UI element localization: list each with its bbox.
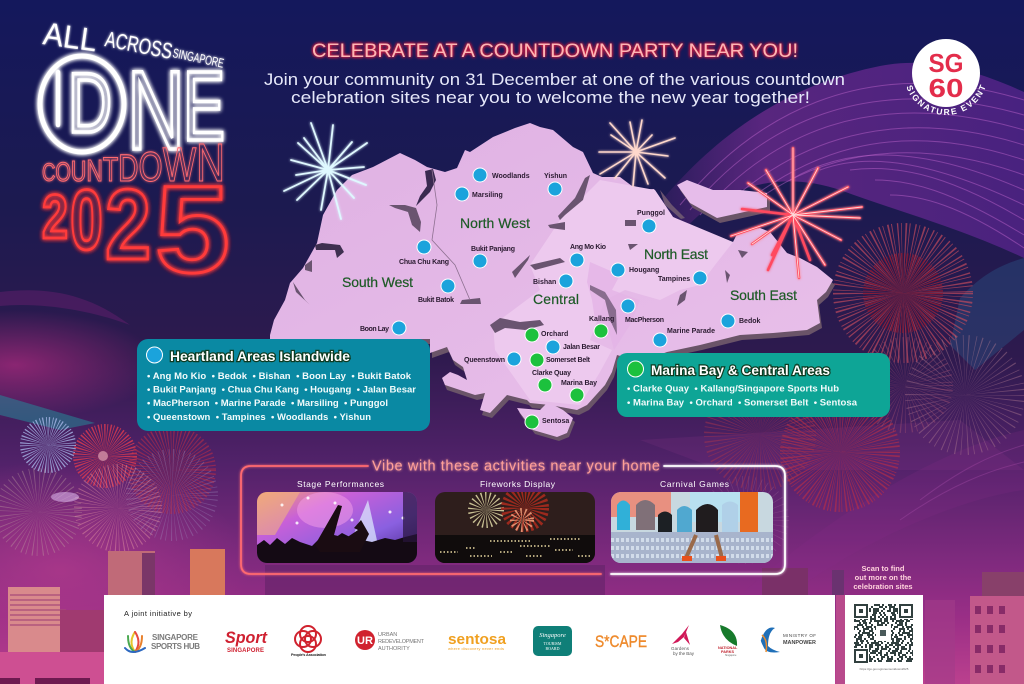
logo tagline: All Across Singapore: SINGAPORE (171, 45, 226, 71)
neon frame (241, 466, 785, 574)
list of central areas: • Clarke Quay • Kallang/Singapore Sports Hub (627, 384, 839, 394)
logo: National Parks: PARKS (721, 650, 734, 654)
headline: CELEBRATE AT A COUNTDOWN PARTY NEAR YOU! (312, 40, 798, 62)
logo: Gardens by the Bay: Gardens (671, 646, 690, 651)
location: Punggol: Punggol (637, 210, 665, 217)
Pulau Ubin island (680, 185, 770, 223)
panel heading: Marina Bay & Central Areas (651, 363, 830, 378)
location: Clarke Quay (532, 370, 571, 392)
logo: People's Association (291, 626, 327, 657)
logo: One Countdown 2025 (40, 15, 230, 299)
panel: Heartland areas (137, 339, 430, 431)
logo: Sentosa: where discovery never ends (448, 646, 504, 651)
logo: Ministry of Manpower: MANPOWER (783, 640, 817, 646)
QR url: https://go.gov.sg/onecountdown2025 (860, 667, 909, 671)
Pulau Ubin island top (677, 180, 767, 218)
logo tagline: All Across Singapore: ACROSS (103, 26, 175, 64)
logo: National Parks: NATIONAL (718, 646, 738, 650)
location: Hougang (611, 263, 659, 277)
teal light beam (0, 395, 95, 430)
location: Ang Mo Kio (570, 244, 606, 267)
intro text (264, 70, 845, 107)
logo: Singapore Tourism Board: Singapore (539, 632, 566, 639)
location: Tampines: Tampines (658, 276, 690, 283)
panel: Marina Bay and Central areas (617, 353, 890, 417)
logo word: COUNTDOWN: COUNTDOWN (42, 133, 225, 193)
city buildings (0, 549, 1024, 684)
central and north east lighter regions (493, 180, 733, 405)
panel heading: Heartland Areas Islandwide (170, 349, 351, 364)
logo: Urban Redevelopment Authority (355, 630, 425, 652)
initiative label: A joint initiative by (124, 609, 192, 618)
list of heartland areas: • Bukit Panjang • Chua Chu Kang • Hougang • Jalan Besar (147, 384, 416, 396)
logo: Scape: S*CAPE (595, 632, 647, 651)
activities heading: Vibe with these activities near your home (372, 458, 660, 474)
logo word: ONE: E (183, 51, 225, 161)
central inner region (587, 262, 640, 350)
location: Bishan: Bishan (533, 279, 556, 286)
partner logo band (104, 595, 835, 684)
logo tagline: All Across Singapore: ALL (41, 15, 100, 58)
location: Marina Bay: Marina Bay (561, 380, 597, 387)
label: Stage Performances: Stage Performances (297, 479, 384, 489)
logo number: 2025: 0 (70, 173, 103, 268)
map of Singapore (270, 123, 835, 441)
location: Marsiling (455, 187, 503, 201)
logo: Urban Redevelopment Authority: URBAN (378, 632, 397, 638)
panel: activities (241, 458, 785, 574)
list of heartland areas: • Ang Mo Kio • Bedok • Bishan • Boon Lay • Bukit Batok (147, 371, 412, 382)
photo: fireworks display (435, 492, 595, 563)
SG60 badge: SG (928, 48, 964, 78)
scan caption: Scan to find (862, 564, 905, 573)
location: Orchard (525, 328, 568, 342)
logo: National Parks: Singapore (725, 654, 737, 657)
logo number: 2025: 2 (42, 183, 68, 252)
SG60 badge (906, 39, 986, 115)
Sentosa island top (517, 402, 573, 437)
SG60 badge: SIGNATURE EVENT (906, 84, 986, 115)
location: Boon Lay (360, 321, 406, 335)
firework: pink burst (599, 120, 675, 186)
location: Jalan Besar: Jalan Besar (563, 344, 600, 351)
logo number: 2025: 2 (105, 169, 151, 281)
QR code card (845, 595, 923, 684)
region name: North West: North West (460, 215, 530, 231)
photo: carnival games (611, 492, 773, 563)
logo: Ministry of Manpower: MINISTRY OF (783, 633, 816, 638)
logo: Gardens by the Bay (671, 625, 695, 656)
logo: Urban Redevelopment Authority: AUTHORITY (378, 646, 410, 652)
location: Marine Parade (653, 328, 715, 347)
firework: cyan burst (284, 123, 367, 219)
logo: Ministry of Manpower (761, 628, 817, 652)
location: Yishun (544, 173, 567, 196)
logo number: 2025: 5 (155, 161, 230, 299)
Sentosa island (519, 406, 575, 441)
blue light streak (950, 258, 1024, 370)
logo: Sentosa: sentosa (448, 631, 507, 648)
location: Chua Chu Kang (399, 240, 449, 266)
SG60 badge: 60 (928, 73, 964, 103)
logo word: ONE: N (127, 48, 185, 173)
location: Bishan (533, 274, 573, 288)
logo: National Parks (718, 625, 738, 657)
background fireworks left (16, 431, 195, 534)
logo: Urban Redevelopment Authority: UR (357, 635, 373, 647)
location: Orchard: Orchard (541, 331, 568, 338)
location: Chua Chu Kang: Chua Chu Kang (399, 259, 449, 266)
location: Bukit Batok: Bukit Batok (418, 297, 454, 304)
location: MacPherson (621, 299, 664, 324)
logo: Singapore Sports Hub (125, 632, 200, 652)
location: Woodlands (473, 168, 530, 182)
QR pattern (854, 605, 913, 661)
logo: Singapore Sports Hub: SINGAPORE (152, 633, 199, 642)
location: Kallang: Kallang (589, 316, 614, 323)
label: Fireworks Display: Fireworks Display (480, 479, 556, 489)
scan caption (853, 564, 913, 591)
location: Boon Lay: Boon Lay (360, 326, 389, 333)
legend dot blue (146, 347, 162, 363)
logo word: ONE: D (68, 56, 112, 150)
label: Carnival Games: Carnival Games (660, 479, 729, 489)
reservoirs and dark channels (293, 169, 748, 335)
map extrusion shadow (272, 128, 835, 418)
photo: stage performance (257, 492, 417, 563)
location: Bukit Panjang: Bukit Panjang (471, 246, 515, 253)
location: Sentosa (525, 415, 569, 429)
region name: Central: Central (533, 291, 579, 307)
scan caption: out more on the (855, 573, 911, 582)
logo: Sport Singapore: Sport (225, 628, 268, 647)
logo: Singapore Tourism Board: BOARD (545, 646, 560, 651)
location: Punggol (637, 210, 665, 233)
background fireworks right (723, 258, 995, 542)
location: MacPherson: MacPherson (625, 317, 664, 324)
location: Queenstown (464, 352, 521, 366)
location: Somerset Belt: Somerset Belt (546, 357, 591, 364)
list of central areas: • Marina Bay • Orchard • Somerset Belt • Sentosa (627, 398, 858, 408)
region name: South East: South East (730, 287, 797, 303)
logo tagline: All Across Singapore (41, 15, 226, 71)
location: Clarke Quay: Clarke Quay (532, 370, 571, 377)
firework: red burst (731, 148, 862, 278)
location: Hougang: Hougang (629, 267, 659, 274)
legend dot green (628, 361, 644, 377)
QR finder squares (853, 603, 914, 664)
scan caption: celebration sites (853, 582, 913, 591)
location: Kallang (589, 316, 614, 338)
location: Yishun: Yishun (544, 173, 567, 180)
logo: Urban Redevelopment Authority: REDEVELOPMENT (378, 639, 425, 645)
logo: Singapore Tourism Board (533, 626, 572, 656)
location: Marina Bay (561, 380, 597, 402)
list of heartland areas: • Queenstown • Tampines • Woodlands • Yishun (147, 412, 371, 423)
location: Sentosa: Sentosa (542, 418, 569, 425)
logo: Singapore Sports Hub: SPORTS HUB (151, 642, 200, 651)
location: Marsiling: Marsiling (472, 192, 503, 199)
logo word: ONE (40, 48, 225, 173)
list of heartland areas: • MacPherson • Marine Parade • Marsiling • Punggol (147, 398, 388, 409)
location: Bedok: Bedok (739, 318, 760, 325)
location: Ang Mo Kio: Ang Mo Kio (570, 244, 606, 251)
location: Woodlands: Woodlands (492, 173, 530, 180)
logo: People's Association: People's Association (291, 653, 327, 657)
intro text: celebration sites near you to welcome the new year together! (291, 88, 810, 107)
main land (270, 123, 833, 413)
region name: North East: North East (644, 246, 708, 262)
location: Bukit Batok (418, 279, 455, 304)
logo: Sport Singapore: SINGAPORE (227, 648, 264, 654)
list of heartland areas (147, 371, 416, 423)
location: Somerset Belt (530, 353, 591, 367)
logo: Gardens by the Bay: by the Bay (673, 651, 695, 656)
logo: Singapore Tourism Board: TOURISM (544, 641, 562, 646)
region name: South West: South West (342, 274, 413, 290)
location: Tampines (658, 271, 707, 285)
list of central areas (627, 384, 858, 408)
location: Jalan Besar (546, 340, 600, 354)
location: Marine Parade: Marine Parade (667, 328, 715, 335)
intro text: Join your community on 31 December at one of the various countdown (264, 70, 845, 89)
location: Bukit Panjang (471, 246, 515, 268)
location: Queenstown: Queenstown (464, 357, 505, 364)
logo number: 2025 (42, 161, 230, 299)
location: Bedok (721, 314, 760, 328)
